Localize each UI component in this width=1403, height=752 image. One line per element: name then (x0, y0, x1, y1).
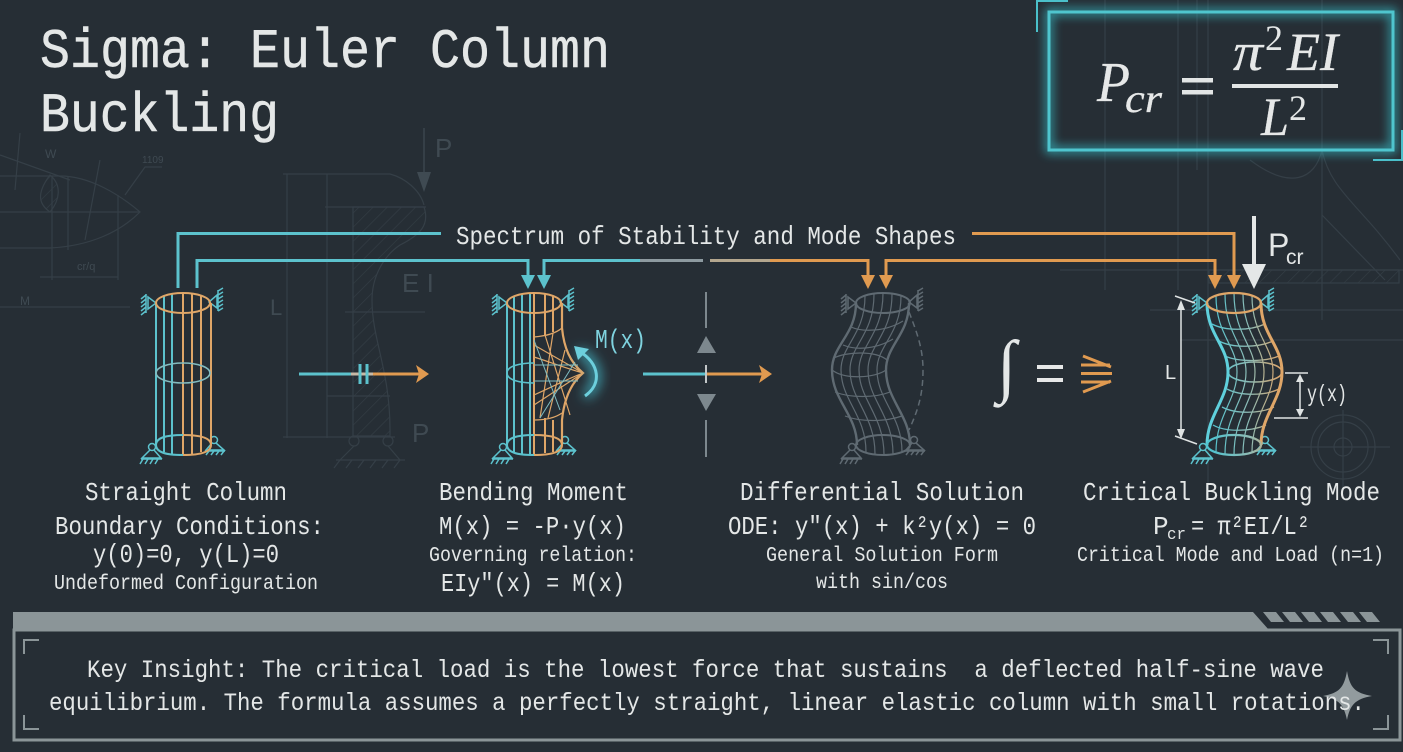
label: straight column: y(0)=0, y(L)=0 (93, 540, 279, 570)
centre column blueprint: P (412, 418, 429, 448)
critical load arrow (1242, 216, 1304, 289)
title (40, 20, 610, 148)
deflection dimension y(x) (1274, 373, 1347, 418)
centre column blueprint: L (270, 295, 282, 320)
connectors: orange (710, 234, 1241, 289)
right beam blueprint (1060, 0, 1403, 500)
left lens blueprint: W (45, 147, 57, 161)
label: differential solution: ODE: y″(x) + k²y(x) = 0 (728, 512, 1036, 542)
integral equals implies symbols (993, 328, 1112, 408)
arrow 2 with stability symbol (643, 292, 772, 457)
title: Buckling (40, 84, 279, 148)
label: bending moment: Bending Moment (439, 478, 628, 508)
label: differential solution: General Solution Form (766, 545, 998, 568)
label: straight column: Straight Column (85, 478, 287, 508)
label: critical buckling mode (1077, 478, 1384, 568)
formula callout: EI (1286, 22, 1341, 82)
centre column blueprint: P (435, 133, 452, 163)
label: bending moment: EIy″(x) = M(x) (441, 569, 625, 599)
spectrum heading: Spectrum of Stability and Mode Shapes (456, 222, 956, 252)
formula callout: 2 (1289, 88, 1307, 128)
column 4: critical buckling mode (1191, 288, 1282, 464)
length dimension L: L (1165, 362, 1176, 384)
left lens blueprint: M (20, 294, 30, 308)
column 1: straight column (140, 288, 225, 464)
label: straight column: Boundary Conditions: (55, 512, 324, 542)
label: critical buckling mode: = π²EI/L² (1191, 512, 1310, 542)
formula callout: P (1096, 52, 1130, 114)
key insight panel (13, 612, 1400, 740)
label: bending moment: M(x) = -P·y(x) (439, 512, 626, 542)
formula callout: π (1233, 22, 1265, 82)
faint blueprint drawings (0, 0, 1403, 500)
formula callout (1037, 1, 1402, 160)
centre column blueprint (270, 128, 452, 468)
label: bending moment (429, 478, 637, 599)
centre column blueprint: E I (402, 268, 434, 298)
formula callout: L (1260, 87, 1289, 147)
label: critical buckling mode: P (1153, 512, 1169, 542)
deflection dimension y(x): y(x) (1307, 382, 1347, 408)
label: straight column: Undeformed Configuration (54, 573, 318, 596)
label: differential solution (728, 478, 1036, 595)
label: critical buckling mode: cr (1167, 526, 1186, 545)
label: differential solution: with sin/cos (816, 572, 948, 595)
title: Sigma: Euler Column (40, 20, 610, 84)
connectors: teal (178, 234, 703, 289)
left lens blueprint: 1109 (142, 155, 164, 166)
left lens blueprint: cr/q (77, 261, 95, 273)
moment arc and label: M(x) (595, 327, 646, 357)
label: straight column (54, 478, 324, 596)
integral equals implies symbols: ∫ (993, 328, 1020, 408)
label: bending moment: Governing relation: (429, 545, 637, 568)
label: differential solution: Differential Solution (740, 478, 1024, 508)
moment arc and label (574, 327, 646, 396)
length dimension L (1165, 296, 1197, 444)
column 3: differential solution (832, 288, 925, 464)
column 2: bending moment (491, 288, 583, 464)
arrow 1 (299, 364, 429, 384)
critical load arrow: cr (1286, 246, 1304, 269)
formula callout: cr (1125, 76, 1162, 121)
formula callout: 2 (1265, 18, 1283, 58)
left lens blueprint (0, 133, 164, 308)
critical load arrow: P (1268, 227, 1289, 263)
